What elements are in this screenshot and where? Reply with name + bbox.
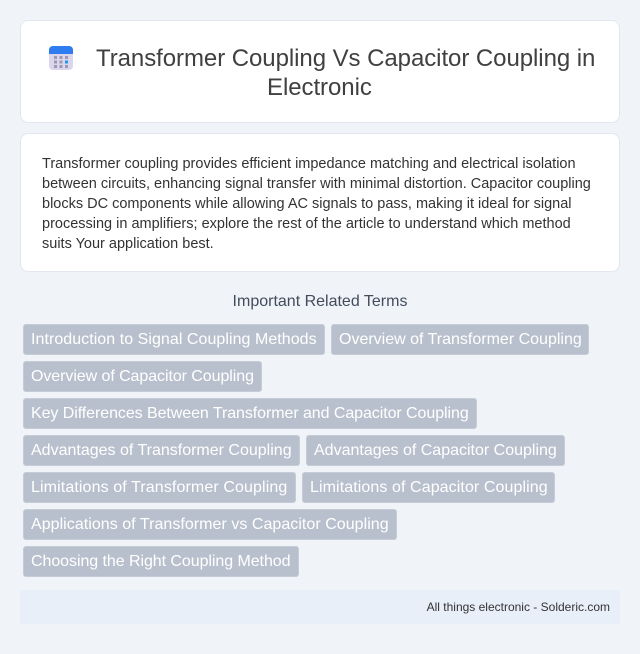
description text [42,156,591,252]
header card [20,20,620,123]
tag [23,435,300,466]
tag: Key Differences Between Transformer and Capacitor Coupling [31,405,469,422]
description card [20,133,620,272]
tag: Limitations of Capacitor Coupling [310,479,548,496]
section heading: Important Related Terms [233,293,407,310]
tag: Applications of Transformer vs Capacitor Coupling [31,516,389,533]
icon: calendar [49,46,73,70]
tag [302,472,555,503]
tag [331,324,589,355]
related terms tags [23,324,589,577]
description text: blocks DC components while allowing AC signals to pass, making it ideal for signal [42,196,572,212]
tag [23,398,477,429]
tag [306,435,565,466]
tag: Overview of Capacitor Coupling [31,368,254,385]
tag: Limitations of Transformer Coupling [31,479,287,496]
tag [23,509,397,540]
description text: between circuits, enhancing signal transfer with minimal distortion. Capacitor coupling [42,176,591,192]
description text: Transformer coupling provides efficient impedance matching and electrical isolation [42,156,576,172]
title: Transformer Coupling Vs Capacitor Coupling in [96,45,595,72]
description text: processing in amplifiers; explore the rest of the article to understand which method [42,216,571,232]
tag: Advantages of Capacitor Coupling [314,442,557,459]
title: Electronic [267,74,372,101]
tag: Advantages of Transformer Coupling [31,442,292,459]
footer text: All things electronic - Solderic.com [427,600,610,614]
description text: suits Your application best. [42,236,214,252]
tag: Overview of Transformer Coupling [339,331,582,348]
tag [23,361,262,392]
tag [23,546,299,577]
tag [23,324,325,355]
footer bar [20,590,620,624]
title [96,45,595,101]
tag [23,472,296,503]
tag: Choosing the Right Coupling Method [31,553,290,570]
tag: Introduction to Signal Coupling Methods [31,331,317,348]
